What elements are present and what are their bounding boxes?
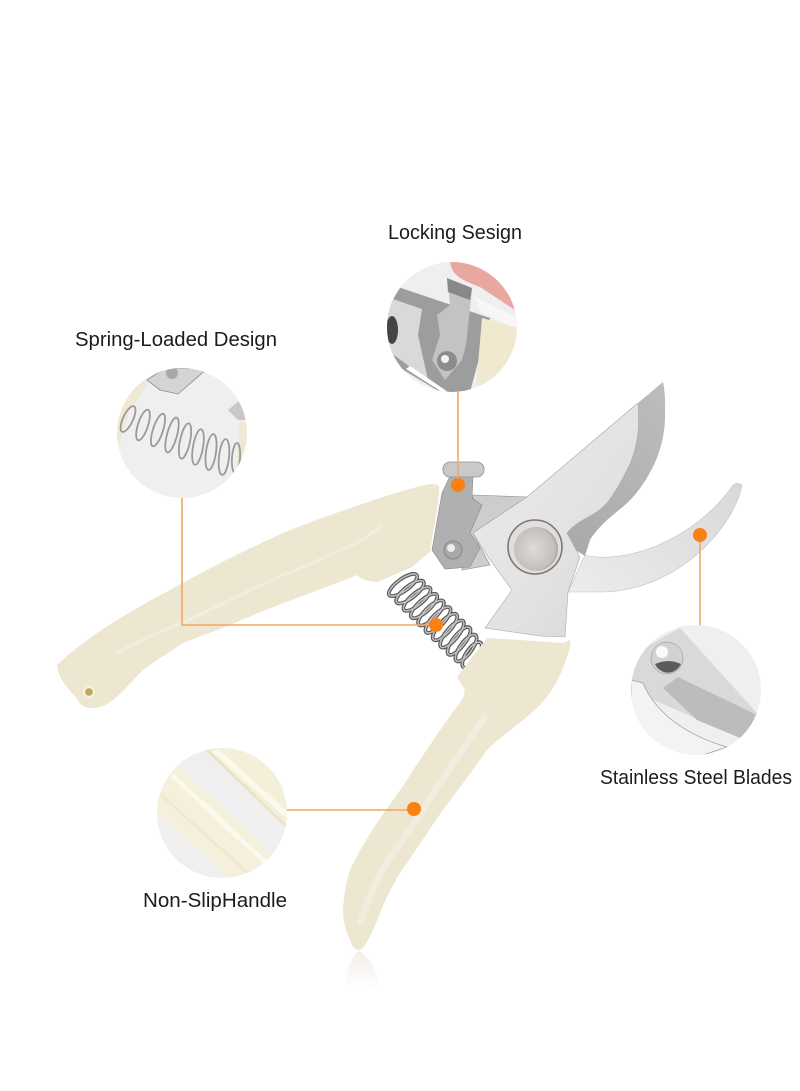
hook blade (568, 483, 742, 592)
pruning shears (57, 382, 742, 950)
detail circle: spring (117, 367, 247, 498)
spring (386, 570, 485, 671)
label: spring-loaded design: Spring-Loaded Design (75, 329, 277, 351)
back plate (462, 495, 527, 570)
detail circle: locking design (386, 262, 518, 392)
callout lines (182, 392, 700, 810)
detail circle: handle texture (157, 748, 287, 878)
pivot bolt (508, 520, 562, 574)
cutting blade and plate (473, 403, 639, 637)
blade bevel (560, 382, 665, 556)
detail circle: blades (631, 625, 762, 756)
label: non-slip handle: Non-SlipHandle (143, 890, 287, 912)
reflection under handle (346, 951, 380, 990)
label: stainless steel blades: Stainless Steel Blades (600, 767, 792, 789)
locking lever (432, 462, 484, 569)
label: locking design: Locking Sesign (388, 222, 522, 244)
callout dots (407, 478, 707, 816)
lower handle (343, 638, 570, 950)
upper handle (57, 484, 439, 708)
